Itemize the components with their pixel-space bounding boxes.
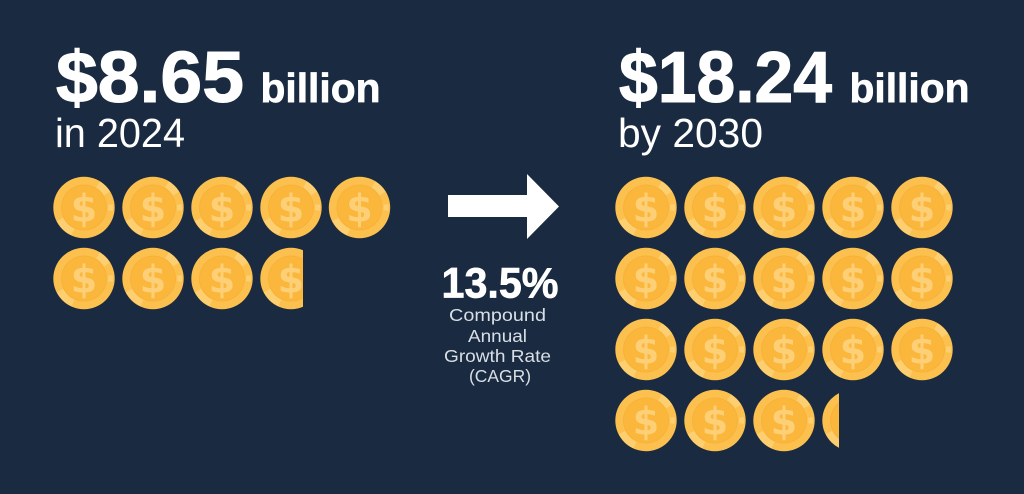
coin group: 2030: $ xyxy=(702,258,728,302)
coin group: 2024: $ xyxy=(278,258,304,302)
heading: 2024 value: billion xyxy=(260,65,380,111)
coin group: 2030: $ xyxy=(771,186,797,230)
growth rate label: (CAGR) xyxy=(469,366,531,386)
coin group: 2030: $ xyxy=(840,186,866,230)
heading: 2030 value: billion xyxy=(850,65,970,111)
subheading: by 2030: by 2030 xyxy=(618,110,763,156)
coin group: 2024: $ xyxy=(140,258,166,302)
coin group: 2030: $ xyxy=(771,328,797,372)
coin group: 2030: $ xyxy=(702,328,728,372)
coin group: 2024: $ xyxy=(346,186,373,230)
coin group: 2024 xyxy=(53,177,390,309)
coin group: 2030: $ xyxy=(633,328,659,372)
coin group: 2030: $ xyxy=(771,258,797,302)
coin group: 2024: $ xyxy=(209,186,235,230)
growth rate label: Compound xyxy=(449,305,546,325)
coin group: 2024: $ xyxy=(209,258,235,302)
growth rate label: Growth Rate xyxy=(444,346,551,366)
coin group: 2030: $ xyxy=(771,400,797,444)
coin group: 2030: $ xyxy=(840,400,866,444)
heading: 2024 value: $8.65 xyxy=(56,38,244,118)
heading: 2030 value: $18.24 xyxy=(619,38,832,118)
heading: 2030 value xyxy=(619,38,970,118)
coin group: 2030: $ xyxy=(909,328,935,372)
subheading: in 2024: in 2024 xyxy=(55,110,185,156)
heading: 2024 value xyxy=(56,38,380,118)
coin group: 2030: $ xyxy=(909,258,935,302)
coin group: 2030: $ xyxy=(702,400,728,444)
coin group: 2030: $ xyxy=(633,400,659,444)
coin group: 2030 xyxy=(615,177,953,451)
coin group: 2024: $ xyxy=(71,258,97,302)
coin group: 2030: $ xyxy=(633,258,659,302)
coin group: 2030: $ xyxy=(702,186,728,230)
coin group: 2030: $ xyxy=(840,258,866,302)
growth rate label: Annual xyxy=(468,326,527,346)
coin group: 2024: $ xyxy=(71,186,97,230)
arrow xyxy=(448,174,559,239)
coin group: 2024: $ xyxy=(140,186,166,230)
coin group: 2024: $ xyxy=(278,186,304,230)
growth rate label xyxy=(444,305,551,386)
growth rate value: 13.5% xyxy=(442,260,558,308)
coin group: 2030: $ xyxy=(633,186,659,230)
coin group: 2030: $ xyxy=(840,328,866,372)
coin group: 2030: $ xyxy=(909,186,935,230)
